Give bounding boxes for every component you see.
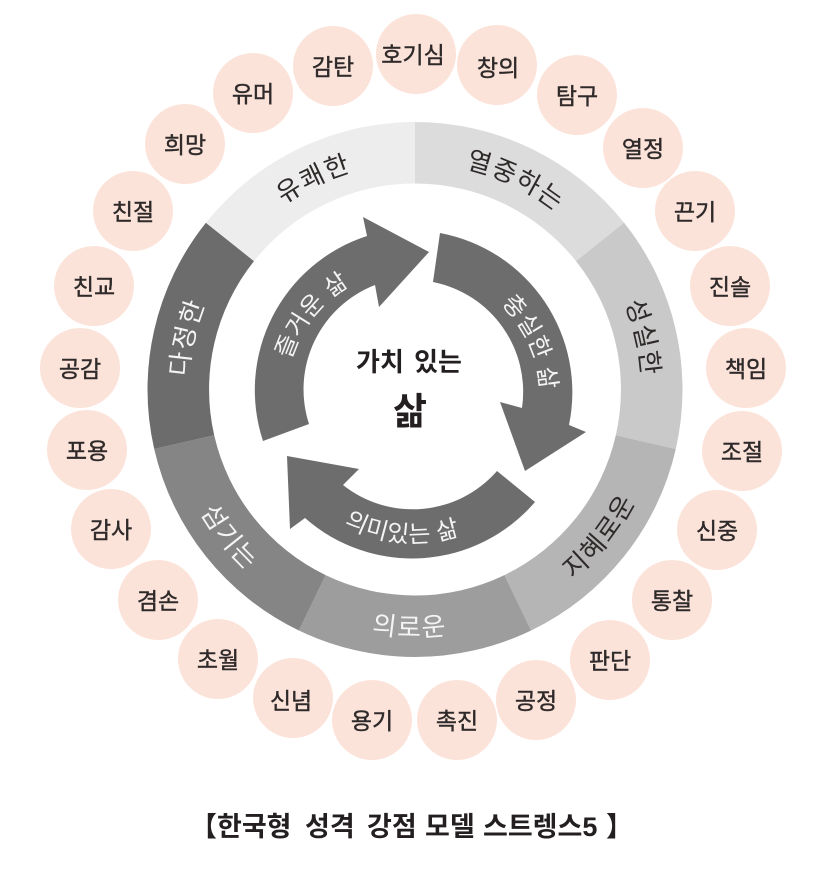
strength: 겸손 bbox=[118, 560, 198, 640]
strength: 친절: 친절 bbox=[112, 199, 154, 225]
ring segment: 섬기는: 섬기는 bbox=[202, 506, 254, 569]
strength: 신념 bbox=[253, 658, 333, 738]
strength: 포용 bbox=[47, 410, 127, 490]
arrow: 즐거운 삶 bbox=[254, 217, 429, 441]
strength: 창의 bbox=[457, 25, 537, 105]
arrow: 충실한 삶: 충실한 삶 bbox=[504, 294, 560, 388]
strength: 끈기: 끈기 bbox=[674, 199, 716, 225]
strength: 호기심 bbox=[376, 14, 456, 94]
outer ring of strengths bbox=[148, 122, 682, 657]
strength: 공정 bbox=[496, 660, 576, 740]
strength: 감탄 bbox=[293, 26, 373, 106]
strength: 공감: 공감 bbox=[59, 356, 101, 382]
strength: 책임: 책임 bbox=[725, 356, 767, 382]
strength: 진솔: 진솔 bbox=[709, 274, 751, 300]
strength: 끈기 bbox=[655, 171, 735, 251]
strength: 탐구 bbox=[537, 55, 617, 135]
ring segment: 열중하는: 열중하는 bbox=[470, 150, 561, 210]
strength: 조절: 조절 bbox=[721, 439, 763, 465]
ring segment: 열중하는 bbox=[415, 122, 624, 261]
ring segment: 지혜로운: 지혜로운 bbox=[562, 496, 634, 576]
ring segment: 다정한: 다정한 bbox=[168, 300, 205, 374]
strength: 열정: 열정 bbox=[622, 136, 664, 162]
ring segment: 섬기는 bbox=[154, 435, 326, 630]
strength: 유머 bbox=[213, 53, 293, 133]
strength: 판단 bbox=[570, 620, 650, 700]
caption title: 】 bbox=[606, 812, 633, 842]
arrow: 의미있는 삶: 의미있는 삶 bbox=[346, 512, 456, 544]
strength: 판단: 판단 bbox=[589, 648, 631, 674]
strength: 유머: 유머 bbox=[232, 81, 274, 107]
ring segment: 성실한 bbox=[576, 222, 682, 449]
strength: 신중 bbox=[677, 490, 757, 570]
strength: 희망 bbox=[145, 104, 225, 184]
caption title: 【 bbox=[190, 812, 217, 842]
arrow: 즐거운 삶: 즐거운 삶 bbox=[274, 270, 347, 357]
center text: 가치 있는 삶 bbox=[356, 347, 462, 432]
ring segment: 유쾌한: 유쾌한 bbox=[278, 152, 348, 202]
ring segment: 유쾌한 bbox=[206, 122, 415, 261]
center text: 가치 있는 삶: 가치 있는 bbox=[356, 347, 462, 377]
strength: 신념: 신념 bbox=[270, 688, 312, 714]
strength: 감탄: 감탄 bbox=[312, 54, 354, 80]
caption title: 강점 bbox=[367, 812, 417, 842]
ring segment: 의로운: 의로운 bbox=[374, 614, 444, 638]
strength: 용기: 용기 bbox=[351, 708, 393, 734]
arrow: 의미있는 삶 bbox=[287, 456, 535, 558]
strength: 창의: 창의 bbox=[477, 55, 519, 81]
strength: 진솔 bbox=[690, 246, 770, 326]
strength: 감사 bbox=[71, 489, 151, 569]
strength: 촉진 bbox=[417, 680, 497, 760]
strength: 통찰: 통찰 bbox=[651, 588, 693, 614]
strength: 촉진: 촉진 bbox=[436, 708, 478, 734]
strength: 열정 bbox=[603, 108, 683, 188]
caption title: 한국형 bbox=[217, 812, 292, 842]
caption title: 성격 bbox=[305, 812, 355, 842]
caption title: 스트렝스5 bbox=[483, 812, 597, 842]
strength: 용기 bbox=[332, 680, 412, 760]
ring segment: 지혜로운 bbox=[504, 435, 676, 630]
strength: 친절 bbox=[93, 171, 173, 251]
strength: 탐구: 탐구 bbox=[556, 83, 598, 109]
strength: 희망: 희망 bbox=[164, 132, 206, 158]
strength: 초월: 초월 bbox=[197, 647, 239, 673]
ring segment: 성실한: 성실한 bbox=[626, 300, 663, 373]
strength: 감사: 감사 bbox=[90, 517, 132, 543]
outer circles of character strengths bbox=[40, 14, 786, 760]
strength: 공감 bbox=[40, 328, 120, 408]
strength: 친교: 친교 bbox=[73, 274, 115, 300]
strength: 조절 bbox=[702, 411, 782, 491]
strength: 책임 bbox=[706, 328, 786, 408]
strength: 겸손: 겸손 bbox=[137, 588, 179, 614]
ring segment: 다정한 bbox=[148, 222, 254, 449]
ring segment: 의로운 bbox=[299, 575, 531, 657]
center text: 가치 있는 삶: 삶 bbox=[393, 391, 427, 432]
caption title: 모델 bbox=[425, 812, 475, 842]
strength: 친교 bbox=[54, 246, 134, 326]
strength: 초월 bbox=[178, 619, 258, 699]
strength: 통찰 bbox=[632, 560, 712, 640]
strength: 호기심: 호기심 bbox=[381, 42, 445, 68]
strength: 공정: 공정 bbox=[515, 688, 557, 714]
arrow: 충실한 삶 bbox=[433, 233, 586, 471]
strength: 포용: 포용 bbox=[66, 438, 108, 464]
strength: 신중: 신중 bbox=[696, 518, 738, 544]
